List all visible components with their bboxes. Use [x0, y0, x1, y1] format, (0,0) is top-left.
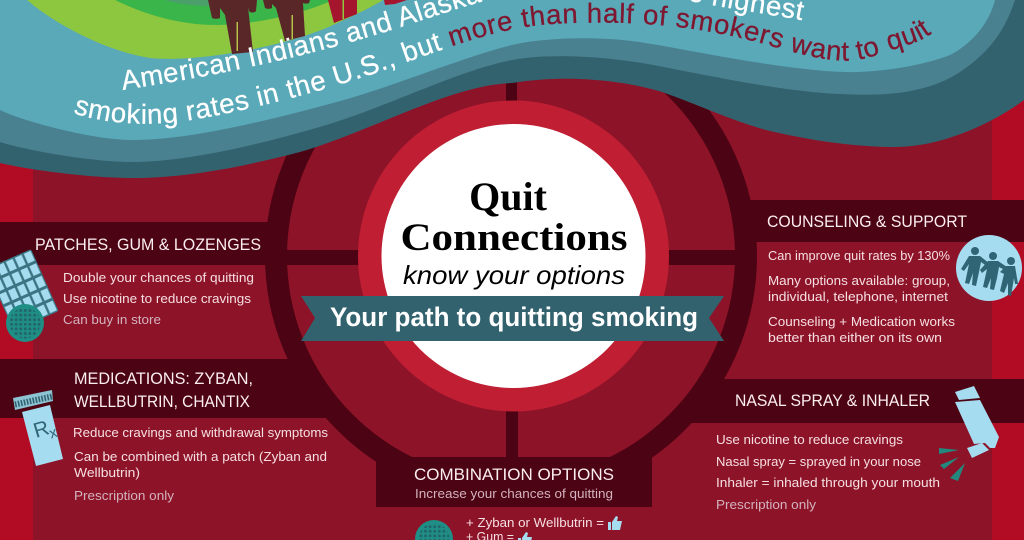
list: Can be combined with a patch (Zyban and	[74, 449, 327, 464]
list: Counseling + Medication works	[768, 314, 956, 329]
icon: thumbs up	[518, 516, 622, 540]
ribbon subtitle: Your path to quitting smoking	[330, 302, 698, 332]
panel: patches heading band	[0, 222, 280, 265]
list: Use nicotine to reduce cravings	[716, 432, 904, 447]
panel: medications	[13, 369, 329, 503]
heading	[74, 369, 253, 411]
list: Prescription only	[716, 497, 817, 512]
icon: inhaler	[939, 386, 999, 481]
icon: red person	[328, 0, 357, 23]
list	[768, 248, 956, 345]
icon: nicotine patch and gum	[0, 249, 59, 342]
headline line 2: smoking rates in the U.S., but more than half of smokers want to quit	[74, 2, 932, 128]
panel: nasal spray and inhaler	[716, 386, 999, 512]
wave headline	[74, 0, 932, 128]
icon: prescription bottle: R	[31, 416, 52, 443]
title: know your options	[403, 260, 625, 290]
list: Wellbutrin)	[74, 465, 140, 480]
heading: COMBINATION OPTIONS	[414, 465, 614, 484]
center badge circle	[358, 100, 669, 412]
icon: brown person middle	[263, 0, 310, 41]
heading: PATCHES, GUM & LOZENGES	[35, 235, 261, 254]
list: Use nicotine to reduce cravings	[63, 291, 252, 306]
panel: nasal heading band	[680, 379, 1024, 423]
list	[73, 425, 329, 503]
list	[716, 432, 940, 512]
heading: MEDICATIONS: ZYBAN,	[74, 369, 253, 388]
icon: red person far	[384, 0, 407, 5]
list	[63, 270, 254, 327]
list: Inhaler = inhaled through your mouth	[716, 475, 940, 490]
subheading: Increase your chances of quitting	[415, 486, 613, 501]
list: Nasal spray = sprayed in your nose	[716, 454, 921, 469]
panel: counseling and support	[767, 212, 1022, 345]
list: Can buy in store	[63, 312, 161, 327]
title	[400, 174, 628, 290]
icon: brown person left	[208, 0, 257, 54]
ribbon subtitle	[301, 296, 724, 341]
icon: gum	[415, 520, 453, 540]
heading: WELLBUTRIN, CHANTIX	[74, 392, 250, 411]
wave banner	[0, 0, 1024, 178]
panel: patches, gum and lozenges	[0, 235, 261, 342]
panel: combination options	[414, 465, 622, 540]
icon: prescription bottle: x	[47, 424, 60, 442]
list: individual, telephone, internet	[768, 289, 948, 304]
panel: counseling heading band	[745, 200, 1024, 242]
list: Reduce cravings and withdrawal symptoms	[73, 425, 329, 440]
heading: COUNSELING & SUPPORT	[767, 212, 967, 231]
title: Quit	[469, 174, 548, 219]
panel: medications heading band	[0, 359, 335, 418]
illustration: green hill with people	[27, 0, 407, 59]
list: + Zyban or Wellbutrin =	[466, 515, 604, 530]
panel: combination heading band	[376, 457, 652, 507]
icon: people holding hands	[956, 235, 1022, 301]
list: better than either on its own	[768, 330, 942, 345]
connector ring	[276, 21, 746, 491]
title: Connections	[400, 216, 628, 259]
list	[466, 515, 604, 540]
heading: NASAL SPRAY & INHALER	[735, 391, 930, 410]
list: Many options available: group,	[768, 273, 950, 288]
list: Double your chances of quitting	[63, 270, 254, 285]
list: Can improve quit rates by 130%	[768, 248, 950, 263]
icon: prescription bottle	[13, 390, 63, 466]
list: Prescription only	[74, 488, 175, 503]
